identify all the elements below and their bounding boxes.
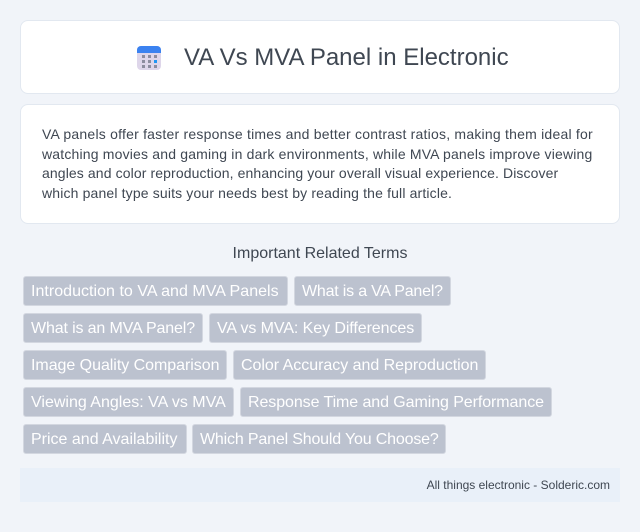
tag: VA vs MVA: Key Differences: [217, 320, 414, 337]
tag: [192, 424, 446, 454]
tag: Color Accuracy and Reproduction: [241, 357, 478, 374]
tag: Price and Availability: [31, 431, 177, 448]
tag: [294, 276, 451, 306]
footer bar: [20, 468, 620, 502]
tag: What is a VA Panel?: [302, 283, 443, 300]
tag: [23, 276, 288, 306]
tag: Viewing Angles: VA vs MVA: [31, 394, 226, 411]
intro paragraph: angles and color reproduction, enhancing your overall visual experience. Discover: [42, 165, 558, 181]
tag: Introduction to VA and MVA Panels: [31, 283, 279, 300]
tag: Image Quality Comparison: [31, 357, 219, 374]
tag: [240, 387, 552, 417]
intro paragraph: VA panels offer faster response times and better contrast ratios, making them ideal for: [42, 126, 593, 142]
header card: [20, 20, 620, 94]
tag: What is an MVA Panel?: [31, 320, 195, 337]
tag: [23, 387, 234, 417]
tag: Response Time and Gaming Performance: [248, 394, 544, 411]
heading: related terms: Important Related Terms: [233, 245, 407, 262]
intro paragraph: [42, 126, 593, 201]
tag: [209, 313, 422, 343]
footer credit: All things electronic - Solderic.com: [427, 478, 610, 492]
icon: calendar grid: [137, 46, 161, 70]
tag: Which Panel Should You Choose?: [200, 431, 439, 448]
tag: [233, 350, 486, 380]
title: VA Vs MVA Panel in Electronic: [184, 44, 509, 71]
related term tags: [23, 276, 552, 454]
intro paragraph: which panel type suits your needs best by reading the full article.: [42, 185, 452, 201]
tag: [23, 424, 187, 454]
tag: [23, 350, 227, 380]
tag: [23, 313, 203, 343]
intro paragraph: watching movies and gaming in dark environments, while MVA panels improve viewing: [42, 146, 592, 162]
intro text panel: [20, 104, 620, 224]
